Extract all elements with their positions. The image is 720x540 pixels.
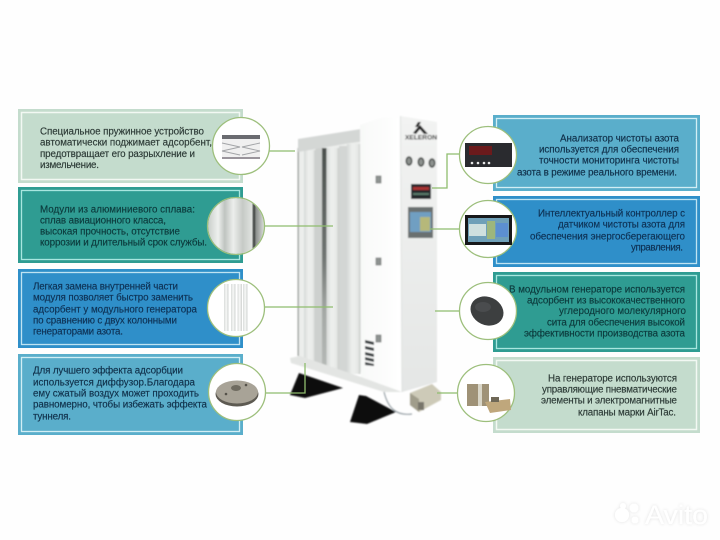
panel text: точности мониторинга чистоты bbox=[539, 156, 679, 166]
panel text: Для лучшего эффекта адсорбции bbox=[33, 366, 183, 376]
panel text: туннеля. bbox=[33, 412, 71, 422]
foot left bbox=[290, 373, 343, 398]
panel box bbox=[493, 272, 700, 352]
panel text: равномерно, чтобы избежать эффекта bbox=[33, 400, 208, 410]
panel: spring device bbox=[18, 109, 243, 183]
icon: carbon molecular sieve bbox=[460, 282, 516, 340]
panel text: эффективности производства азота bbox=[524, 328, 686, 340]
panel: smart controller bbox=[493, 196, 700, 267]
panel box bbox=[493, 115, 700, 191]
watermark: Avito bbox=[615, 500, 708, 530]
adsorption column 3 bbox=[347, 144, 360, 374]
watermark dots bbox=[615, 503, 638, 524]
column 1 shaded side bbox=[316, 148, 322, 364]
watermark text: Avito bbox=[645, 500, 708, 530]
panel text: Модули из алюминиевого сплава: bbox=[40, 204, 195, 216]
panel: easy replacement bbox=[18, 269, 243, 348]
panel text: управляющие пневматические bbox=[542, 384, 678, 396]
panel box bbox=[493, 196, 700, 267]
panel: molecular sieve bbox=[493, 272, 700, 352]
purity analyzer bbox=[411, 184, 431, 199]
panel text: углеродного молекулярного bbox=[559, 306, 687, 317]
panel text: азота в режиме реального времени. bbox=[517, 168, 677, 178]
panel text: используется для обеспечения bbox=[539, 144, 679, 156]
panel text: В модульном генераторе используется bbox=[509, 284, 685, 296]
panel inner frame bbox=[22, 358, 240, 432]
icon: analyzer device bbox=[460, 126, 516, 184]
panel text: автоматически поджимает адсорбент, bbox=[40, 138, 212, 148]
panel: pneumatic valves bbox=[493, 357, 700, 433]
panel text: элементы и электромагнитные bbox=[541, 396, 678, 406]
panel text: Анализатор чистоты азота bbox=[560, 134, 680, 144]
touch controller bbox=[408, 207, 433, 238]
frame rod bbox=[298, 148, 299, 356]
panel text: обеспечения энергосберегающего bbox=[530, 232, 686, 242]
panel text: управления. bbox=[631, 242, 683, 254]
panel text bbox=[33, 282, 198, 338]
cabinet fold shading bbox=[400, 116, 402, 392]
panel inner frame bbox=[22, 272, 240, 344]
logo text: XELERON bbox=[405, 134, 437, 142]
panel text bbox=[517, 134, 680, 178]
icon: spring device bbox=[212, 118, 270, 174]
nitrogen generator cabinet bbox=[290, 116, 441, 424]
panel box bbox=[18, 187, 243, 263]
panel text: датчиком чистоты азота для bbox=[558, 220, 685, 230]
panel text: коррозии и длительный срок службы. bbox=[40, 238, 207, 248]
panel text: сплав авиационного класса, bbox=[40, 216, 166, 226]
icon: diffuser disk bbox=[208, 364, 266, 420]
rear frame bbox=[298, 136, 362, 372]
panel text: клапаны марки AirTac. bbox=[578, 408, 676, 418]
icon: replacement filters bbox=[208, 280, 264, 336]
panel inner frame bbox=[22, 112, 240, 180]
panel text: сита для обеспечения высокой bbox=[547, 318, 685, 328]
cabinet front face bbox=[360, 116, 402, 392]
panel inner frame bbox=[496, 276, 696, 348]
panel text: генераторами азота. bbox=[33, 326, 123, 338]
panel: diffuser bbox=[18, 354, 243, 435]
panel text: адсорбент у модульного генератора bbox=[33, 304, 198, 316]
panel box bbox=[18, 354, 243, 435]
logo mark bbox=[413, 122, 428, 134]
cabinet latches bbox=[376, 176, 381, 342]
panel: purity analyzer bbox=[493, 115, 700, 191]
top manifold bbox=[298, 126, 380, 152]
panel text: модуля позволяет быстро заменить bbox=[33, 292, 193, 304]
panel box bbox=[18, 269, 243, 348]
panel text bbox=[40, 126, 212, 171]
vent slots bbox=[365, 340, 374, 366]
adsorption column 2 bbox=[326, 148, 339, 370]
air tube bbox=[384, 392, 412, 414]
panel text bbox=[530, 208, 686, 254]
base plate bbox=[290, 356, 402, 392]
icon: pneumatic valves bbox=[458, 364, 514, 422]
panel box bbox=[493, 357, 700, 433]
leader lines bbox=[262, 151, 465, 393]
column 2 shaded side bbox=[339, 146, 347, 372]
pressure gauges bbox=[406, 157, 435, 167]
valve block bbox=[410, 384, 441, 412]
panel inner frame bbox=[496, 360, 696, 430]
foot right bbox=[350, 395, 396, 424]
panel text: ему сжатый воздух может проходить bbox=[33, 388, 199, 400]
panel text bbox=[541, 374, 678, 418]
panel text: Легкая замена внутренней части bbox=[33, 282, 178, 292]
panel text: по сравнению с двух колонными bbox=[33, 316, 177, 326]
panel text: На генераторе используются bbox=[548, 374, 677, 384]
panel: aluminium modules bbox=[18, 187, 243, 263]
dark column gap bbox=[322, 148, 326, 366]
panel inner frame bbox=[496, 118, 696, 188]
panel text: предотвращает его разрыхление и bbox=[40, 149, 195, 160]
panel text: адсорбент из высококачественного bbox=[527, 296, 686, 306]
panel text: используется диффузор.Благодара bbox=[33, 378, 196, 388]
panel text: измельчение. bbox=[40, 160, 99, 171]
panel text: Специальное пружинное устройство bbox=[40, 126, 205, 138]
panel inner frame bbox=[22, 190, 240, 260]
panel box bbox=[18, 109, 243, 183]
cabinet side face bbox=[400, 116, 437, 392]
icon: touch controller bbox=[460, 200, 516, 258]
panel text: высокая прочность, отсутствие bbox=[40, 226, 181, 238]
adsorption column 1 bbox=[304, 150, 316, 362]
panel text bbox=[509, 284, 687, 340]
icon: aluminium column closeup bbox=[208, 198, 264, 254]
panel inner frame bbox=[496, 200, 696, 264]
panel text: Интеллектуальный контроллер с bbox=[538, 208, 685, 220]
panel text bbox=[33, 366, 208, 422]
panel text bbox=[40, 204, 207, 248]
